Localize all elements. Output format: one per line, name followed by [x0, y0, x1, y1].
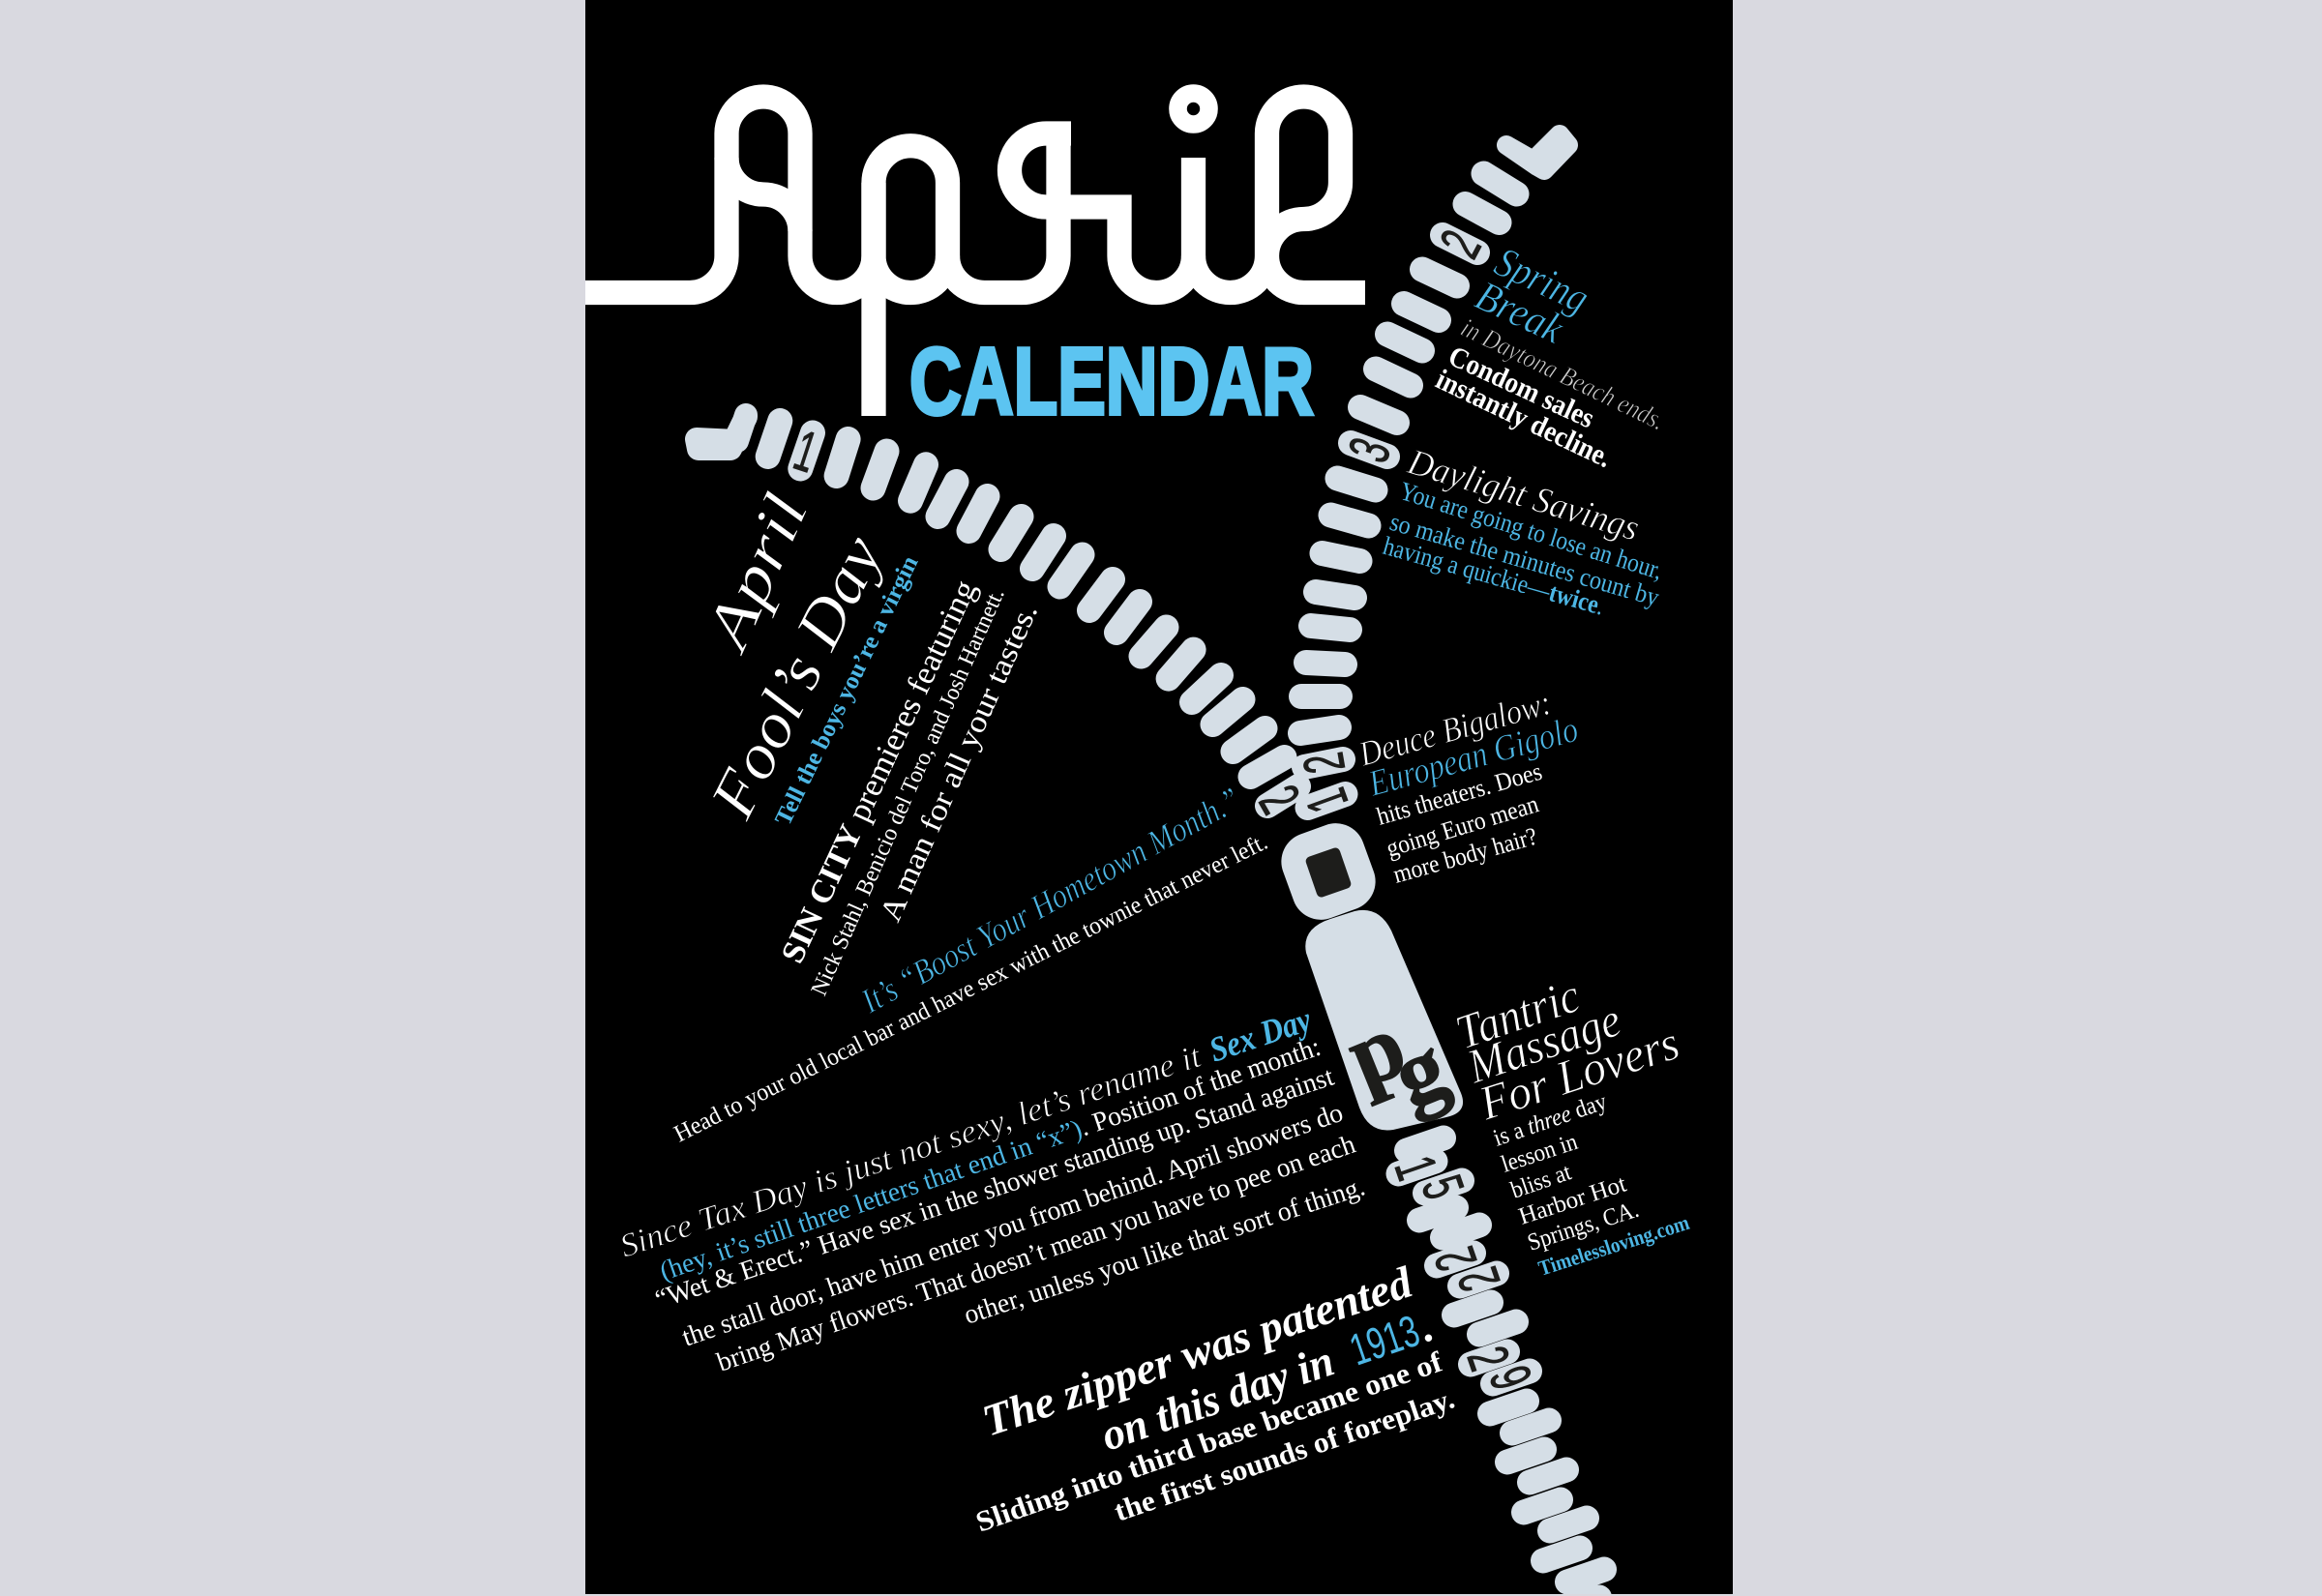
tooth dates: 9 [1476, 1359, 1543, 1397]
text block: Boost Your Hometown Month: Head to your old local bar and have sex with the townie that never left. [670, 829, 1271, 1147]
pg logo: p [1333, 992, 1418, 1108]
text block: Tantric Massage: Harbor Hot [1516, 1170, 1629, 1230]
text block: Tantric Massage: For Lovers [1472, 1015, 1685, 1131]
text block: Tantric Massage: Tantric [1449, 967, 1587, 1059]
text block: Tantric Massage: Springs, CA. [1525, 1197, 1642, 1256]
text block: zipper patent [971, 1256, 1459, 1539]
text block: Deuce Bigalow: European Gigolo [1364, 709, 1583, 805]
text block: Spring Break: Break [1469, 272, 1572, 353]
text block: Tantric Massage: Timelessloving.com [1535, 1210, 1692, 1281]
text block: Tantric Massage: Massage [1460, 991, 1627, 1094]
tooth dates: 2 [1454, 1340, 1521, 1377]
text block: zipper patent: . [1412, 1301, 1438, 1351]
text block: Deuce Bigalow [1354, 683, 1583, 889]
text block: Sex Day: bring May flowers. That doesn’t mean you have to pee on each [713, 1130, 1359, 1378]
text block: Daylight Savings: so make the minutes count by [1386, 507, 1663, 612]
text block: Sex Day [615, 999, 1369, 1378]
tooth dates: 1 [1382, 1149, 1448, 1187]
poster background [585, 0, 1733, 1594]
text block: Spring Break: Condom sales [1444, 340, 1599, 434]
title: CALENDAR: CALENDAR [909, 330, 1314, 435]
text block: Deuce Bigalow: going Euro mean [1383, 789, 1542, 863]
text block: Sin City: SIN CITY premieres featuring [775, 575, 984, 968]
tooth dates: 2 [1429, 222, 1494, 268]
pg logo: g [1379, 1014, 1460, 1127]
text block: Daylight Savings: having a quickie—twice. [1380, 531, 1608, 621]
tooth dates: 1 [787, 419, 824, 486]
tooth dates: 2 [1446, 1260, 1513, 1298]
text block: zipper patent: 1913 [1343, 1305, 1425, 1374]
text block: Sex Day: (hey, it’s still three letters that end in “x”). Position of the month: [656, 1032, 1325, 1287]
text block: Tantric Massage [1449, 967, 1692, 1281]
tooth dates [787, 222, 1543, 1397]
text block: zipper patent: on this day in [1095, 1336, 1340, 1460]
text block: Deuce Bigalow: Deuce Bigalow: [1354, 683, 1556, 774]
text block: Spring Break: instantly decline. [1431, 364, 1617, 474]
zipper pull tab [1305, 910, 1463, 1131]
left zipper branch teeth [697, 415, 1298, 806]
text block: zipper patent: the first sounds of foreplay. [1111, 1382, 1459, 1528]
zipper slider ring [1281, 823, 1376, 920]
text block: Sin City: Nick Stahl, Benicio del Toro, and Josh Hartnett. [807, 584, 1010, 999]
tooth dates: 2 [1246, 776, 1311, 824]
text block: April Fool's Day: Tell the boys you’re a virgin [770, 552, 924, 830]
text block: Spring Break [1431, 238, 1670, 474]
text block: Daylight Savings: You are going to lose an hour, [1396, 476, 1666, 585]
tooth dates: 2 [1292, 748, 1357, 778]
text block: Sex Day: “Wet & Erect.” Have sex in the shower standing up. Stand against [651, 1062, 1338, 1315]
text block: Sex Day: other, unless you like that sort of thing. [961, 1171, 1369, 1331]
text block: Deuce Bigalow: hits theaters. Does [1374, 757, 1545, 831]
right zipper branch teeth [1300, 134, 1568, 808]
pg logo [1349, 1035, 1455, 1122]
text block: Sex Day: Sex Day [1205, 999, 1317, 1070]
text block: Tantric Massage: bliss at [1507, 1159, 1575, 1204]
text block: Tantric Massage: lesson in [1499, 1129, 1581, 1178]
text block: Boost Your Hometown Month: It’s “Boost Your Hometown Month.” [854, 780, 1247, 1020]
tooth dates: 5 [1409, 1168, 1475, 1206]
title: April [585, 93, 1365, 416]
text block: Spring Break: in Daytona Beach ends. [1456, 312, 1670, 436]
text block: April Fool's Day: April [690, 484, 821, 664]
tooth dates: 1 [1295, 781, 1361, 820]
tooth dates: 3 [1337, 430, 1404, 470]
text block: Sex Day: the stall door, have him enter you from behind. April showers do [678, 1098, 1347, 1353]
zipper [697, 134, 1604, 1596]
text block: April Fool's Day: Fool’s Day [697, 524, 897, 830]
text block: Tantric Massage: is a three day [1490, 1088, 1611, 1152]
text block: Sin City: A man for all your tastes. [873, 598, 1044, 927]
text block: April Fool's Day [690, 484, 924, 830]
text block: Deuce Bigalow: more body hair? [1390, 822, 1540, 889]
text block: Spring Break: Spring [1488, 238, 1596, 322]
text block: Sex Day: Since Tax Day is just not sexy, let’s rename it [615, 1038, 1206, 1265]
text block: zipper patent: The zipper was patented [976, 1256, 1418, 1445]
text block: zipper patent: Sliding into third base became one of [971, 1345, 1447, 1539]
text block: Daylight Savings: Daylight Savings [1403, 441, 1644, 549]
lower zipper teeth [1399, 1138, 1604, 1596]
tooth dates: 2 [1423, 1240, 1490, 1278]
text block: Daylight Savings [1380, 441, 1666, 621]
